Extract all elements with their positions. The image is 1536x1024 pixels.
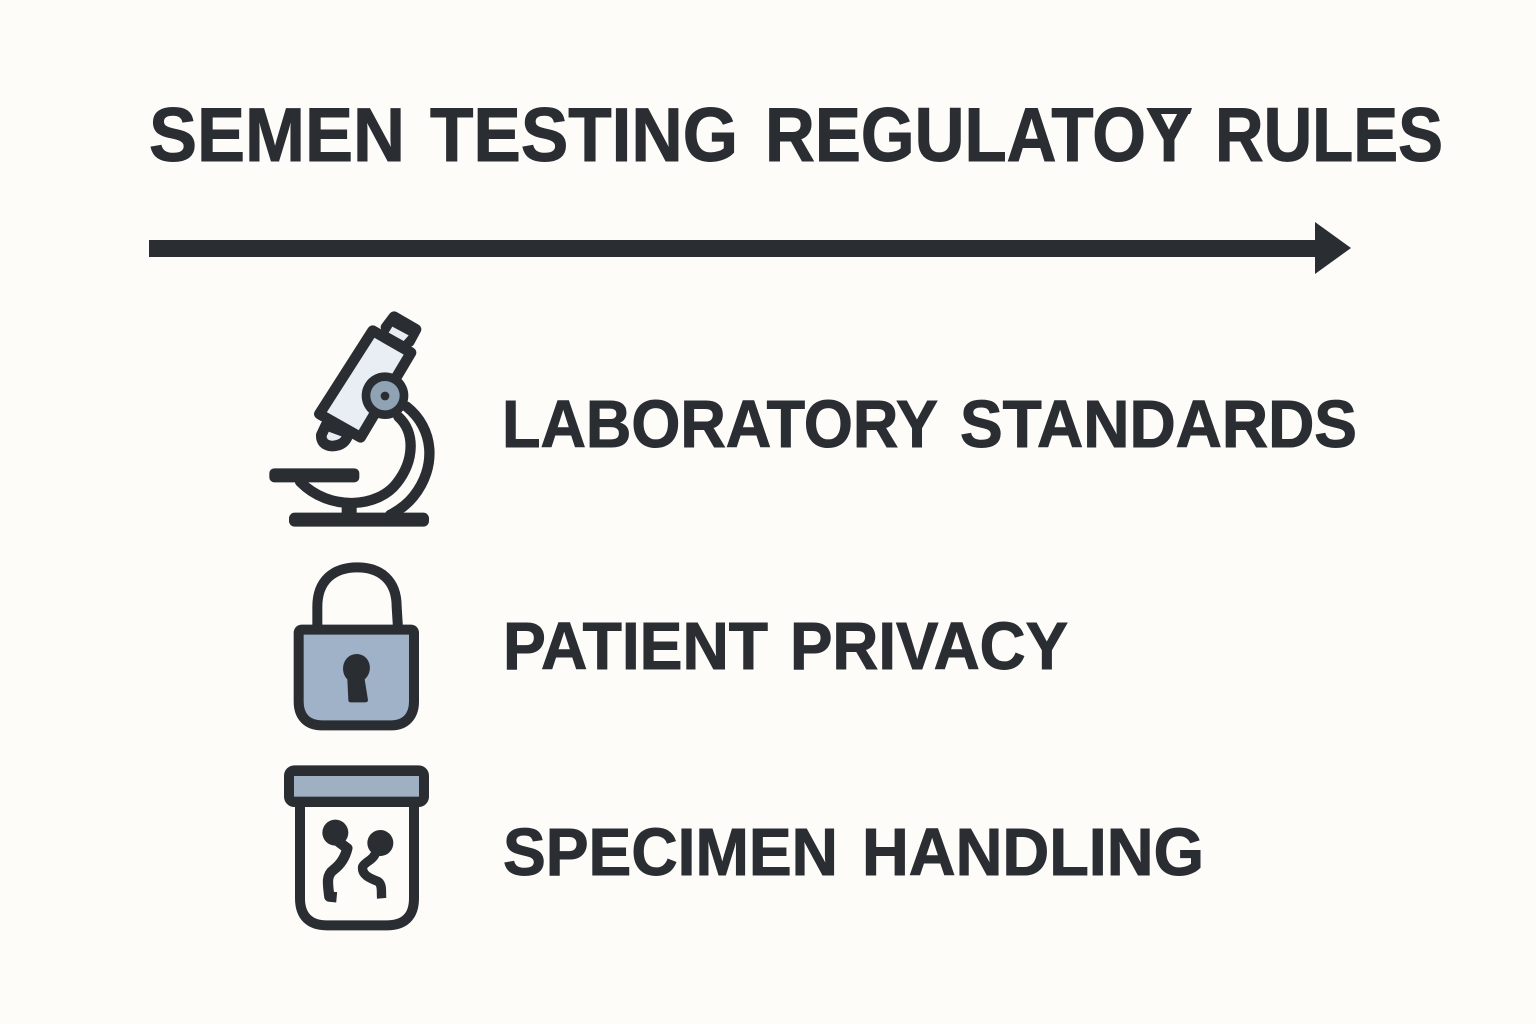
label: laboratory standards: STANDARDS — [960, 387, 1357, 462]
row: laboratory standards — [269, 317, 1357, 527]
title — [149, 93, 1443, 178]
label: laboratory standards — [502, 387, 1357, 462]
label: laboratory standards: LABORATORY — [502, 387, 938, 462]
label: patient privacy: PATIENT — [503, 609, 768, 684]
label: patient privacy: PRIVACY — [790, 609, 1068, 684]
row: patient privacy — [299, 567, 1068, 725]
label: specimen handling: SPECIMEN — [503, 815, 838, 890]
label: specimen handling — [503, 815, 1204, 890]
label: specimen handling: HANDLING — [862, 815, 1204, 890]
icon: specimen jar — [289, 770, 424, 925]
label: patient privacy — [503, 609, 1068, 684]
arrow — [149, 222, 1351, 274]
icon: padlock — [299, 567, 414, 725]
title: SEMEN — [149, 93, 405, 178]
icon: microscope — [269, 317, 429, 527]
title: REGULATOY — [765, 93, 1192, 178]
title: RULES — [1215, 93, 1443, 178]
title: TESTING — [430, 93, 738, 178]
row: specimen handling — [289, 770, 1204, 925]
